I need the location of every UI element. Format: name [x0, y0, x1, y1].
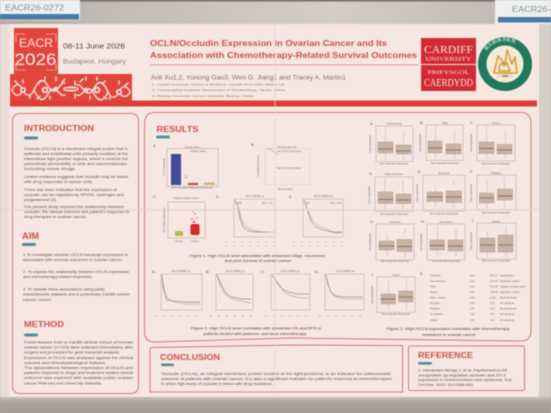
text: introduction: occludin, the clinical outcome and patient's response to	[24, 210, 129, 214]
text: introduction: intercellular tight junction regions, where it controls the	[24, 157, 128, 161]
table: fig 2K: 2.0e-05	[490, 292, 499, 294]
chart: fig 1C dot plot: Normal	[175, 240, 183, 243]
table: fig 2K: Not significant	[500, 302, 515, 305]
boxplot: fig 2G docetaxel: Docetaxel	[390, 221, 401, 224]
text: aim: cancer cohort.	[23, 298, 52, 302]
boxplot: fig 2I avastin: Gene expression	[470, 231, 473, 250]
text: conclusion: Occludin (OCLN), an integral membrane protein located at the tight junctions, is an indicator for unfavourable	[161, 372, 391, 376]
heading: method: METHOD	[24, 319, 64, 329]
table: fig 2K: Avastin	[430, 319, 438, 322]
sticker: abstract number left: EACR26-0272	[5, 2, 64, 12]
floral banner and red rule	[10, 74, 537, 106]
chart: fig 3D Kaplan-Meier	[315, 269, 364, 316]
conference logo block: 2026	[14, 51, 56, 69]
accent bar: results	[156, 136, 170, 138]
chart: fig 1D Kaplan-Meier RFS: OCLN 209925_at	[246, 195, 265, 198]
chart: fig 1C dot plot: Tailspot: Ovarian cancer	[173, 197, 199, 200]
boxplot: fig 2E docetaxel: Docetaxel	[439, 172, 450, 175]
text: reference	[418, 368, 512, 387]
chart: fig 1B survival curve: Cumulative Survival	[257, 155, 260, 177]
boxplot: fig 2C taxane: C.	[470, 120, 474, 125]
conference logo block: EACR	[19, 38, 53, 50]
heading: results: RESULTS	[156, 124, 199, 134]
title: OCLN/Occludin Expression in Ovarian Cancer and Its	[150, 38, 387, 48]
table: fig 2K: Treatment	[430, 274, 441, 278]
boxplot: fig 2C taxane	[470, 120, 515, 166]
authors: 3. Peking University Cancer Hospital, Beijing, China	[152, 94, 254, 98]
title: Association with Chemotherapy-Related Survival Outcomes	[150, 50, 417, 60]
table: fig 2K: Docetaxel	[430, 302, 441, 305]
boxplot: fig 2A chemotherapy	[369, 121, 413, 166]
sticker: abstract number right	[495, 0, 551, 24]
caption: figure 1: and poor survival of ovarian cancer	[224, 259, 292, 263]
chart: fig 1B survival curve: Clinical cohort OS	[277, 146, 297, 149]
text: introduction: Limited evidence suggests that occludin may be linked	[24, 175, 128, 179]
logo: Cardiff University	[421, 38, 476, 91]
text: reference: 1. Hernández-Monge J, et al. Papillomavirus E6	[418, 368, 507, 372]
chart: fig 3A Kaplan-Meier	[152, 269, 202, 316]
boxplot: fig 2E docetaxel: Non-responder Responder	[430, 212, 458, 216]
boxplot: fig 2F paclitaxel: Paclitaxel	[491, 172, 502, 175]
logo: Cardiff University: CAERDYDD	[424, 77, 473, 89]
text: aim: 2. To explore the relationship between OCLN expression	[23, 270, 129, 274]
logo: hospital seal	[477, 36, 533, 92]
conference date and place	[63, 44, 127, 66]
text: aim	[23, 253, 130, 302]
table: fig 2K: 0.57	[470, 308, 475, 310]
boxplot: fig 2F paclitaxel	[470, 169, 516, 214]
title rule	[150, 64, 418, 66]
text: introduction: Occludin (OCLN) is a membrane integral protein that in	[24, 147, 128, 151]
table: fig 2K: 0.41	[490, 320, 495, 322]
text: introduction: occludin can be regulated by HPV16, oestrogen and	[24, 193, 124, 197]
boxplot: fig 2B platin	[419, 120, 463, 165]
text: conclusion: outcome of patients with ovarian cancer. It is also a significant indicator for patient's response to chemotherapies	[161, 377, 392, 381]
chart: fig 1D Kaplan-Meier RFS: HR = 1.51	[262, 202, 274, 205]
boxplot: fig 2H gemcitabine	[420, 219, 465, 263]
caption: figure 1: Figure 1. High OCLN level associates with advanced stage, recurrence	[190, 254, 326, 258]
chart: fig 1A bar chart: OCLN transcript	[163, 158, 166, 176]
text: introduction	[24, 147, 129, 219]
boxplot: fig 2J pooled: Gene expression	[371, 285, 374, 304]
conference date and place: Budapest, Hungary	[63, 58, 127, 66]
text: method: The associations between expression of OCLN and	[24, 366, 133, 370]
text: introduction: epithelial and endothelial cells primarily localises at the	[24, 152, 128, 156]
caption: figure 3: Figure 3. High OCLN level correlates with shortened OS and RFS in	[191, 326, 321, 330]
table: fig 2K: Significant, modest	[500, 291, 520, 294]
boxplot: fig 2I avastin: I.	[472, 218, 474, 223]
text: introduction: with drug responses of cancer cells.	[24, 180, 93, 184]
chart: fig 1B survival curve: B	[251, 142, 254, 147]
chart: fig 1B survival curve: High OCLN expression	[277, 167, 302, 170]
table: fig 2K: 1.0e-10	[490, 281, 499, 283]
boxplot: fig 2A chemotherapy: Gene expression	[369, 134, 372, 153]
chart: fig 1D Kaplan-Meier RFS: D	[216, 194, 219, 199]
chart: fig 1E Kaplan-Meier OS: E	[289, 194, 292, 199]
table: fig 2K: Borderline/weak	[500, 308, 517, 310]
chart: fig 1A bar chart	[153, 143, 218, 190]
boxplot: fig 2B platin: B.	[420, 120, 424, 125]
heading: introduction: INTRODUCTION	[24, 123, 94, 133]
boxplot: fig 2A chemotherapy: Non-responder Responder	[380, 162, 408, 166]
chart: fig 1B survival curve: Low OCLN expression	[277, 150, 302, 153]
boxplot: fig 2B platin: Non-responder Responder	[431, 162, 459, 165]
caption: figure 3: patients treated with platinum- and taxol chemotherapy	[204, 332, 307, 336]
chart: fig 1C dot plot: C	[153, 194, 156, 199]
chart: fig 3A Kaplan-Meier: A.	[152, 269, 156, 274]
chart: fig 1A bar chart: C	[185, 174, 188, 179]
boxplot: fig 2D platin and taxane: Gene expression	[368, 185, 371, 204]
boxplot: fig 2J pooled: Non-responder Responder	[382, 313, 410, 316]
table: fig 2K: 0.61	[470, 281, 475, 283]
heading: aim: AIM	[22, 231, 39, 241]
text: aim: and chemotherapy-related responses.	[23, 275, 93, 279]
text: method: Fresh tissues from a Cardiff clinical cohort of human	[24, 340, 133, 344]
text: method: surgery and processed for gene transcript analysis.	[24, 350, 120, 354]
text: introduction: drug therapies in ovarian cancer.	[24, 215, 87, 219]
title	[150, 38, 417, 60]
accent bar: reference	[418, 362, 432, 365]
heading: reference: REFERENCE	[418, 351, 474, 360]
text: reference: Cell Res. 2013; 319:2588-603.	[418, 383, 474, 387]
chart: fig 3B Kaplan-Meier: B.	[206, 269, 210, 274]
table: fig 2K: Interpretation	[500, 274, 514, 278]
table: fig 2K: Not significant	[500, 313, 515, 316]
table: fig 2K: Chemotherapy	[430, 280, 446, 283]
boxplot: fig 2J pooled	[371, 272, 415, 316]
authors: 2. Yuhuangding Hospital, Department of Gynaecology, Yantai, China	[152, 88, 286, 92]
chart: fig 1D Kaplan-Meier RFS: RFS	[237, 202, 242, 205]
table: fig 2K: 0.53	[470, 320, 475, 322]
chart: fig 1E Kaplan-Meier OS	[289, 194, 343, 246]
chart: fig 1C dot plot: OCLN gene expression	[163, 207, 166, 232]
heading: conclusion: CONCLUSION	[160, 352, 220, 362]
boxplot: fig 2D platin and taxane: D.	[369, 171, 373, 176]
logo: hospital seal: 烟台毓璜顶医院	[483, 36, 516, 52]
table: fig 2K: Borderline/weak	[500, 296, 517, 300]
boxplot: fig 2C taxane: Gene expression	[470, 133, 473, 152]
boxplot: fig 2H gemcitabine: H.	[421, 219, 425, 224]
text: reference: oncoprotein up-regulates occludin and ZO-2	[418, 374, 506, 378]
chart: fig 3C Kaplan-Meier	[261, 269, 310, 316]
table: fig 2K	[420, 271, 525, 322]
text: aim: transcriptomic datasets and a preliminary Cardiff ovarian	[23, 292, 130, 296]
boxplot: fig 2F paclitaxel: Gene expression	[470, 183, 473, 202]
text: method	[24, 340, 134, 386]
caption: figure 2	[386, 327, 510, 337]
table: fig 2K: 0.002	[490, 298, 496, 300]
boxplot: fig 2G docetaxel: G.	[370, 219, 374, 224]
table: fig 2K: 0.60	[470, 292, 475, 294]
boxplot: fig 2C taxane: Taxane	[492, 122, 501, 125]
boxplot: fig 2B platin: Platin	[442, 122, 449, 125]
boxplot: fig 2B platin: Gene expression	[419, 133, 422, 152]
authors: 1. Cardiff University School of Medicine, Cardiff CF14 4XN, Wales, UK	[152, 82, 285, 86]
boxplot: fig 2C taxane: Non-responder Responder	[482, 162, 510, 166]
text: aim: 1.To investigate whether OCLN transcript expression is	[23, 253, 128, 257]
chart: fig 1D Kaplan-Meier RFS	[216, 194, 275, 246]
table: fig 2K: 5.0e-08	[490, 286, 499, 288]
chart: fig 1E Kaplan-Meier OS: OCLN 209925_at	[314, 195, 333, 198]
panel: conclusion	[150, 345, 402, 392]
text: conclusion: in which high levels of occludin is linked with drug resistance.	[161, 382, 273, 386]
text: aim: 3. To validate these associations using public	[23, 288, 105, 292]
chart: fig 1B survival curve	[251, 142, 310, 191]
sticker: abstract number left	[0, 0, 80, 20]
boxplot: fig 2G docetaxel: Gene expression	[369, 232, 372, 251]
boxplot: fig 2I avastin: Non-responder Responder	[482, 260, 510, 262]
panel: reference	[408, 346, 524, 390]
chart: fig 1A bar chart: Clinical cohort	[184, 146, 200, 149]
text: conclusion	[161, 372, 392, 386]
text: introduction: progesterone [1].	[24, 198, 57, 202]
accent bar: introduction	[24, 136, 38, 140]
authors	[151, 76, 347, 98]
boxplot: fig 2H gemcitabine: Non-responder Responder	[432, 260, 460, 263]
text: method: outcome and clinical/pathological features.	[24, 361, 106, 365]
table: fig 2K: 0.25	[490, 303, 495, 305]
logo: Cardiff University: PRIFYSGOL	[428, 71, 470, 76]
chart: fig 3D Kaplan-Meier: OCLN 209925_at	[336, 270, 355, 273]
chart: fig 1A bar chart: Ovarian cancer	[190, 150, 206, 153]
chart: fig 1B survival curve: Time (months)	[277, 188, 293, 191]
text: method: cancer RNA-seq and GeneChip datasets.	[24, 382, 102, 386]
table: fig 2K: 0.54	[470, 303, 475, 305]
chart: fig 1C dot plot: Tumour	[191, 240, 199, 243]
table: fig 2K: 0.03	[490, 308, 495, 310]
boxplot: fig 2D platin and taxane: Platin and taxane	[385, 173, 404, 176]
boxplot: fig 2E docetaxel: Gene expression	[416, 183, 419, 202]
boxplot: fig 2A chemotherapy: Chemotherapy	[386, 122, 403, 126]
table: fig 2K: Taxane	[430, 292, 438, 294]
boxplot: fig 2J pooled: J.	[371, 272, 374, 277]
table: fig 2K: ROC P	[490, 276, 498, 278]
caption: figure 1	[190, 254, 326, 263]
text: aim: associated with survival outcomes in ovarian cancer.	[23, 258, 123, 262]
table: fig 2K: AUC	[470, 274, 475, 278]
boxplot: fig 2D platin and taxane	[368, 171, 413, 216]
boxplot: fig 2G docetaxel: Non-responder Responder	[381, 260, 409, 263]
table: fig 2K: Platin	[430, 286, 436, 288]
logo: hospital seal: 1890	[502, 74, 509, 78]
text: introduction: The present study explored the relationship between	[24, 205, 124, 209]
table: fig 2K: Significant, strongest signal	[500, 286, 525, 288]
chart: fig 3C Kaplan-Meier: OCLN 209925_at	[281, 270, 300, 273]
text: method: Expression of OCLN was analysed against the clinical	[24, 356, 133, 360]
table: fig 2K: Paclitaxel	[430, 308, 440, 310]
panel: results	[144, 112, 531, 342]
text: reference: expression in ovariectomized mice epidermis. Exp	[418, 378, 512, 382]
chart: fig 3C Kaplan-Meier: C.	[261, 269, 265, 274]
boxplot: fig 2E docetaxel: E.	[418, 169, 422, 174]
chart: fig 3B Kaplan-Meier	[206, 269, 253, 316]
accent bar: aim	[22, 243, 36, 246]
table: fig 2K: 0.51	[490, 314, 495, 316]
boxplot: fig 2I avastin: Avastin	[492, 220, 501, 224]
boxplot: fig 2F paclitaxel: F.	[470, 169, 473, 174]
text: introduction: including some drugs.	[24, 167, 76, 171]
boxplot: fig 2A chemotherapy: A.	[370, 121, 374, 126]
authors: Anli Xu1,2, Yunong Gao3, Wen G. Jiang1 and Tracey A. Martin1	[151, 76, 347, 82]
table: fig 2K: Gemcitabine	[430, 313, 444, 316]
table: fig 2K: Not significant	[500, 319, 515, 322]
text: introduction: paracellular permeability of cells and macromolecules	[24, 162, 127, 166]
table: fig 2K: 0.59	[470, 298, 475, 300]
chart: fig 3D Kaplan-Meier: D.	[315, 269, 319, 274]
panel: left column	[12, 114, 138, 394]
chart: fig 1C dot plot	[153, 194, 205, 243]
accent bar: conclusion	[161, 364, 174, 366]
chart: fig 1A bar chart: Non-metastasis Metastasis Recurrence	[171, 186, 214, 190]
logo: Cardiff University: CARDIFF	[424, 44, 473, 56]
table: fig 2K: K	[420, 271, 423, 276]
caption: figure 2: Figure 2. High OCLN expression correlates with chemotherapy	[386, 327, 510, 331]
text: method: ovarian cancer (n=110) were collected immediately after	[24, 346, 134, 350]
conference logo block	[14, 28, 58, 74]
logo: Cardiff University: UNIVERSITY	[426, 58, 472, 62]
boxplot: fig 2F paclitaxel: Non-responder Responder	[482, 212, 510, 214]
caption: figure 3	[191, 326, 321, 336]
text: introduction: There has been indication that the expression of	[24, 188, 118, 192]
text: method: outcome was explored with available public ovarian	[24, 376, 133, 380]
table: fig 2K: 0.62	[470, 286, 475, 288]
chart: fig 1A bar chart: A	[153, 143, 156, 148]
table: fig 2K: 0.52	[470, 314, 475, 316]
table: fig 2K: Significant, modest	[500, 280, 520, 283]
boxplot: fig 2H gemcitabine: Gene expression	[420, 232, 423, 251]
caption: figure 2: resistance in ovarian cancer	[422, 333, 477, 337]
boxplot: fig 2G docetaxel	[369, 219, 414, 263]
accent bar: method	[24, 334, 38, 336]
boxplot: fig 2I avastin	[470, 218, 516, 262]
boxplot: fig 2D platin and taxane: Non-responder Responder	[380, 213, 408, 216]
boxplot: fig 2E docetaxel	[416, 169, 465, 216]
chart: fig 1E Kaplan-Meier OS: OS	[306, 202, 310, 205]
table: fig 2K: Platin + taxane	[430, 296, 446, 300]
chart: fig 1E Kaplan-Meier OS: HR = 1.42	[330, 202, 342, 205]
chart: fig 3A Kaplan-Meier: OCLN 209925_at	[172, 270, 191, 273]
text: method: patient's response to drugs and treatment related clinical	[24, 371, 133, 375]
conference date and place: 08-11 June 2026	[63, 44, 125, 50]
chart: fig 3B Kaplan-Meier: OCLN 209925_at	[226, 270, 245, 273]
boxplot: fig 2J pooled: Pooled	[392, 274, 400, 277]
boxplot: fig 2H gemcitabine: Gemcitabine	[439, 221, 453, 224]
